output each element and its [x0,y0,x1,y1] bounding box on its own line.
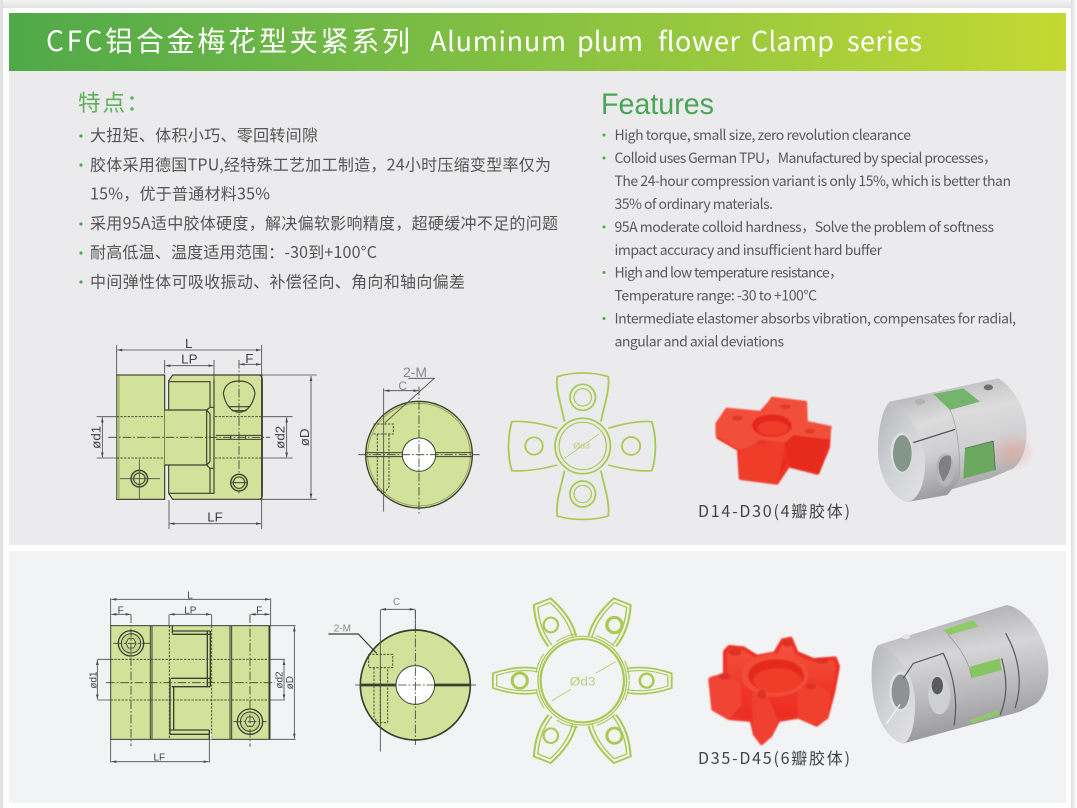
text block: English feature list: impact accuracy and insufficient hard buffer [614,240,883,260]
icon: red 4-lobe elastomer [716,397,831,484]
text block: Chinese feature list: 耐高低温、温度适用范围：-30到+100°C [90,239,377,263]
panel: bottom product section [9,551,1066,803]
technical drawing: 4-lobe side and end views [89,336,480,529]
title: English: Clamp [751,20,834,59]
end view: 2-M [334,624,351,635]
text block: English feature list: 95A moderate colloid hardness，Solve the problem of softness [614,217,994,237]
label: D14-D30: D14-D30(4瓣胶体) [698,498,850,522]
icon: 6-lobe elastomer outline: Ød3 [570,674,596,688]
side view dimensions: F [118,605,124,616]
side view body [106,614,275,747]
end view: C [393,597,400,608]
icon: aluminum coupling 4-lobe [878,378,1035,502]
text block: Chinese feature list: 15%，优于普通材料35% [90,180,270,204]
text block: Chinese feature list: 胶体采用德国TPU,经特殊工艺加工制造，24小时压缩变型率仅为 [90,152,551,176]
label: D35-D45: D35-D45(6瓣胶体) [698,745,850,769]
side view dimensions: F [245,351,253,366]
side view dimensions: øD [285,676,296,689]
panel: top product section [9,71,1066,545]
icon: red 6-lobe elastomer [708,639,838,745]
text block: English feature list [602,125,1016,352]
side view body [108,360,270,499]
text block: English feature list: Temperature range: -30 to +100°C [614,286,817,306]
text block: English feature list: High torque, small size, zero revolution clearance [614,125,911,145]
end view: C [398,379,407,393]
text block: English feature list: The 24-hour compression variant is only 15%, which is better than [614,171,1011,191]
title banner [9,13,1066,71]
title: English: series [847,20,922,59]
icon: 4-lobe elastomer outline [509,373,655,519]
side view dimensions: LF [154,752,165,763]
side view dimensions: L [187,590,193,601]
text block: English feature list: Colloid uses German TPU，Manufactured by special processes， [614,148,997,168]
heading: Chinese features: 特点 [78,86,125,118]
title: English [430,20,922,59]
side view dimensions: øD [297,428,312,446]
side view dimensions: L [185,336,192,351]
side view dimensions: LP [181,352,198,367]
title: English: Aluminum [430,20,566,59]
side view dimensions: ød1 [88,671,99,689]
end view [328,597,476,752]
icon: 6-lobe elastomer outline [493,596,672,766]
side view dimensions: LP [184,605,197,616]
title: English: plum [577,20,643,59]
side view dimensions: ød1 [89,426,104,449]
text block: English feature list: 35% of ordinary materials. [614,194,773,214]
side view dimensions: LF [207,510,223,525]
text block: Chinese feature list [79,122,558,292]
side view dimensions: F [256,605,262,616]
text block: Chinese feature list: 采用95A适中胶体硬度，解决偏软影响精度，超硬缓冲不足的问题 [90,210,558,234]
title: English: flower [658,20,741,59]
side view dimensions [89,336,317,529]
text block: English feature list: High and low temperature resistance， [614,262,843,282]
heading: Features: Features [601,88,714,121]
side view dimensions: ød2 [272,426,287,449]
side view dimensions: ød2 [274,671,285,689]
side view dimensions [88,590,296,763]
technical drawing: 6-lobe side and end views [88,590,476,763]
icon: 4-lobe elastomer outline: Ød3 [573,441,590,451]
title: Chinese: CFC铝合金梅花型夹紧系列 [46,20,410,60]
end view: 2-M [403,364,427,380]
text block: Chinese feature list: 大扭矩、体积小巧、零回转间隙 [90,122,318,146]
icon: aluminum coupling 6-lobe [872,605,1048,743]
text block: Chinese feature list: 中间弹性体可吸收振动、补偿径向、角向和轴向偏差 [90,268,465,292]
text block: English feature list: Intermediate elastomer absorbs vibration, compensates for radial, [614,308,1016,328]
end view [358,364,480,515]
text block: English feature list: angular and axial deviations [614,332,784,352]
